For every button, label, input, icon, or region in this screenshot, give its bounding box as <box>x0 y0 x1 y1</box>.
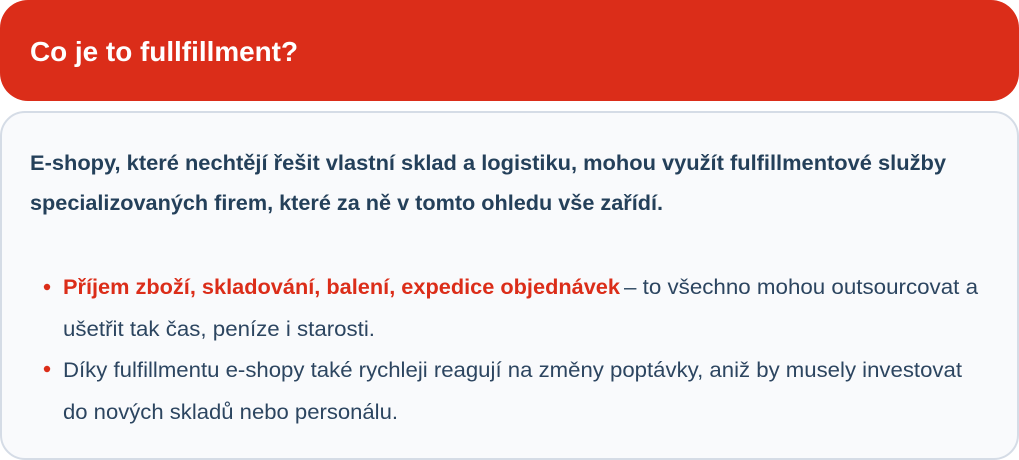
panel: description <box>1 112 1018 459</box>
bullet item 2 <box>44 359 962 424</box>
lead paragraph <box>30 151 946 215</box>
header panel <box>0 0 1019 101</box>
title: Co je to fullfillment? <box>30 36 298 67</box>
bullet item 2: Díky fulfillmentu e-shopy také rychleji reagují na změny poptávky, aniž by musely investovat <box>63 359 962 382</box>
bullet item 2: do nových skladů nebo personálu. <box>63 401 398 424</box>
bullet item 1: Příjem zboží, skladování, balení, expedice objednávek <box>63 275 620 299</box>
bullet item 1 <box>44 275 978 341</box>
lead paragraph: specializovaných firem, které za ně v tomto ohledu vše zařídí. <box>30 191 663 215</box>
bullet item 1: ušetřit tak čas, peníze i starosti. <box>63 318 375 341</box>
bullet list <box>44 275 978 424</box>
bullet item 1: – to všechno mohou outsourcovat a <box>624 276 978 299</box>
lead paragraph: E-shopy, které nechtějí řešit vlastní sklad a logistiku, mohou využít fulfillmentové služby <box>30 151 946 175</box>
